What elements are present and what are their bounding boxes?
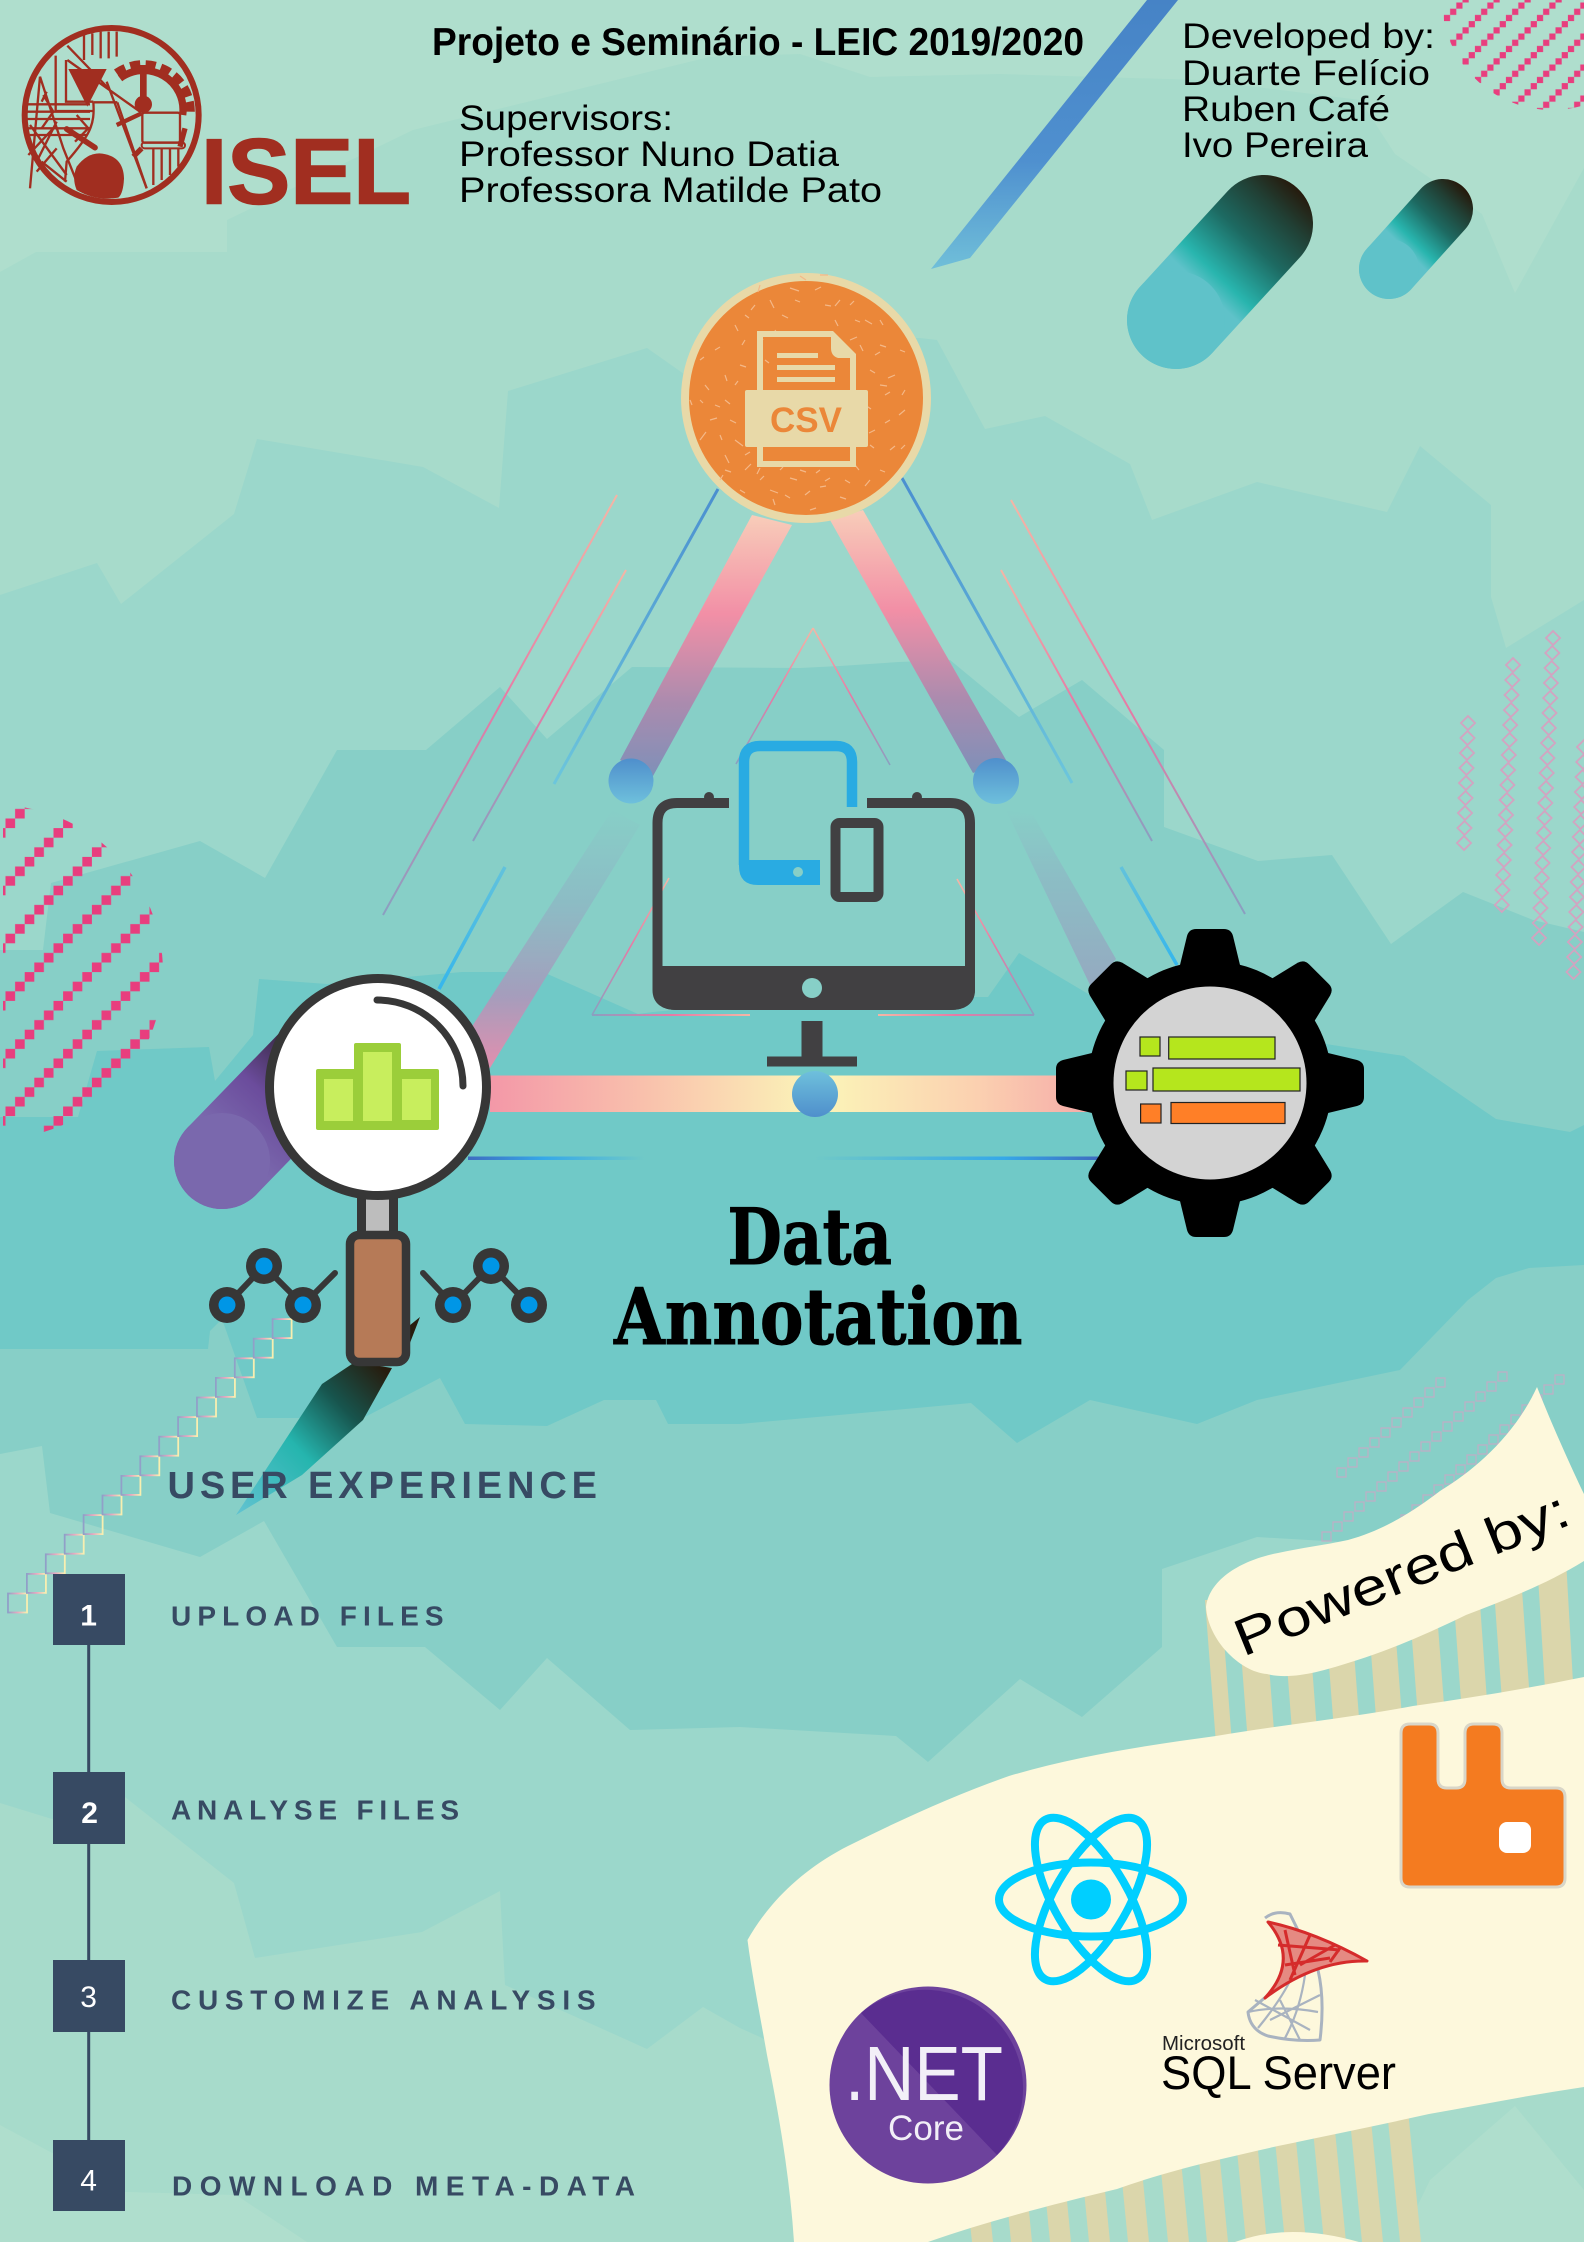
triangle: nodes (608, 758, 1019, 1117)
header: developers: Ivo Pereira (1182, 126, 1369, 165)
triangle: inner outline (592, 628, 1034, 1016)
Microsoft: Microsoft (1162, 2033, 1245, 2055)
icon: gear with list (1056, 929, 1364, 1237)
step 2 (53, 1772, 459, 1844)
pattern: right diamond chains (1457, 631, 1584, 979)
pattern: lower left square chain (8, 1319, 292, 1612)
phone (836, 823, 878, 897)
heading: Data Annotation (613, 1192, 1022, 1363)
logo: .NET Core (830, 1986, 1026, 2184)
banner stripes: lower (967, 2090, 1421, 2242)
speckle texture (690, 275, 905, 510)
logo emblem (25, 28, 199, 202)
header: developers (1182, 17, 1435, 165)
network right (423, 1248, 547, 1323)
step 4: DOWNLOAD META-DATA (172, 2170, 635, 2201)
SQL Server vault icon (1248, 1913, 1367, 2040)
monitor frame (653, 792, 975, 1066)
tablet (739, 746, 852, 885)
header: supervisors: Professor Nuno Datia (459, 135, 840, 174)
step 3 (53, 1960, 596, 2032)
header: developers: Ruben Café (1182, 90, 1390, 129)
step 3: CUSTOMIZE ANALYSIS (171, 1984, 596, 2016)
network left (209, 1248, 335, 1323)
icon: CSV badge (685, 275, 927, 519)
capsule: small teal (1359, 209, 1443, 299)
header: supervisors: Supervisors: (459, 99, 673, 138)
header: supervisors (459, 99, 882, 210)
header: title: Projeto e Seminário - LEIC 2019/2020 (432, 21, 1084, 64)
handle (350, 1235, 406, 1362)
document icon (745, 331, 868, 467)
blue slash top (931, 0, 1178, 269)
steps timeline (53, 1574, 635, 2211)
header: supervisors: Professora Matilde Pato (459, 171, 882, 210)
shard: dark teal (236, 1317, 420, 1515)
CSV label: CSV (770, 401, 843, 440)
step 1: UPLOAD FILES (171, 1601, 444, 1632)
neck (357, 1190, 398, 1235)
pattern: pink dotted circle top right (1442, 0, 1584, 110)
step 2: ANALYSE FILES (171, 1794, 459, 1826)
heading: user experience: USER EXPERIENCE (168, 1465, 597, 1507)
banner: technologies (748, 1677, 1584, 2242)
bar chart (316, 1043, 439, 1130)
monitor button (802, 978, 822, 998)
logo wordmark: ISEL (201, 120, 411, 224)
heading: Data Annotation: Annotation (613, 1272, 1022, 1363)
banner stripes: upper (1205, 1560, 1578, 1770)
logo: React (999, 1801, 1183, 1998)
step 1 (53, 1574, 444, 1645)
header: ISEL logo (25, 28, 411, 223)
capsule: large teal (1127, 224, 1264, 369)
pattern: pink dotted circle left (0, 805, 163, 1139)
icon: monitor with devices (653, 746, 975, 1066)
pattern: lower right square chains (1322, 1372, 1564, 1541)
list items (1126, 1037, 1300, 1124)
step 4: 4 (80, 2165, 97, 2198)
banner: bottom sliver (1235, 2232, 1359, 2242)
step 1: 1 (80, 1600, 97, 1633)
triangle: gradient bars (460, 510, 1116, 1160)
banner label: Powered by: (1226, 1481, 1578, 1668)
heading: Data Annotation: Data (728, 1192, 892, 1283)
logo: RabbitMQ (1401, 1724, 1565, 1887)
icon: magnifier with bar chart (209, 978, 547, 1362)
step 4 (53, 2140, 635, 2211)
triangle: thin accent lines (383, 478, 1245, 989)
header: developers: Duarte Felício (1182, 54, 1430, 93)
lens (270, 978, 486, 1196)
logo: SQL Server (1161, 1913, 1396, 2099)
logo: .NET Core: Core (888, 2109, 964, 2148)
capsule: purple (174, 1060, 320, 1209)
gear body (1056, 929, 1364, 1237)
header: developers: Developed by: (1182, 17, 1435, 56)
logo: .NET Core: .NET (845, 2031, 1003, 2117)
SQL Server wordmark: SQL Server (1161, 2046, 1396, 2099)
step 2: 2 (81, 1797, 98, 1830)
banner: powered by (1206, 1387, 1584, 1676)
step 3: 3 (80, 1981, 97, 2014)
